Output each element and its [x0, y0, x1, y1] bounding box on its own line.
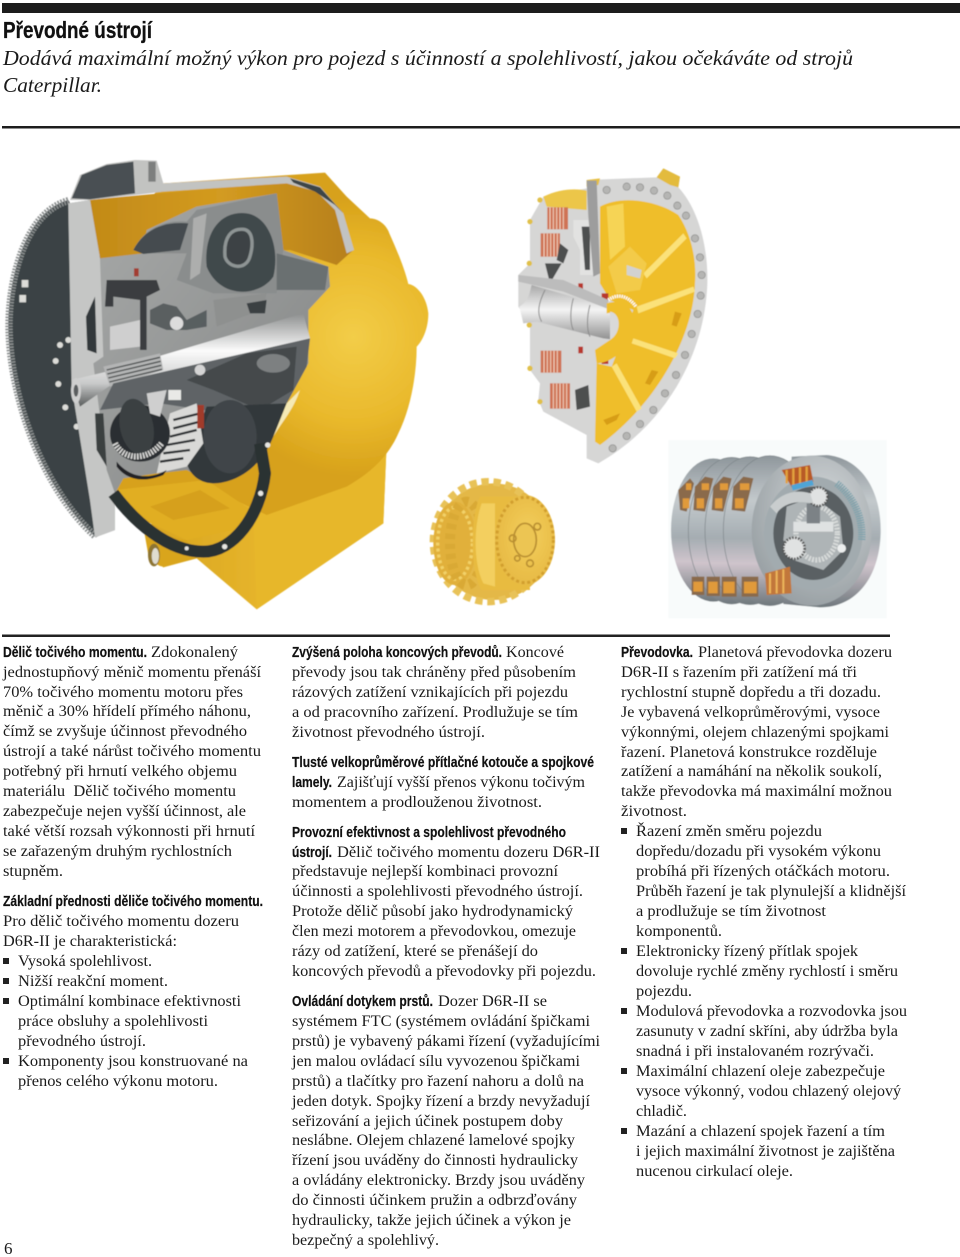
top black bar: [2, 3, 960, 13]
bolt holes: [603, 183, 705, 452]
bolts: [527, 197, 543, 404]
dark channels: [573, 220, 595, 275]
column 3: transmission text: D6R-II s řazením při zatížení má tři: [621, 664, 858, 681]
column 1: torque divider text: čímž se zvyšuje účinnost převodného: [3, 723, 247, 740]
column 2: finger-tip control: jeden dotyk. Spojky řízení a brzdy nevyžadují: [291, 1093, 591, 1110]
column 3: bullet list: Mazání a chlazení spojek řazení a tím: [636, 1123, 886, 1140]
column 2: clutch discs: [292, 755, 594, 811]
column 1: advantages list: D6R-II je charakteristická:: [3, 933, 177, 950]
column 2: finger-tip control: Ovládání dotykem prstů.: [292, 994, 433, 1010]
gray plate section: [68, 193, 330, 537]
column 2: clutch discs: lamely.: [292, 775, 332, 791]
column 3: bullet list: probíhá při řízených otáčkách motoru.: [636, 863, 890, 880]
column 1: torque divider text: materiálu Dělič točivého momentu: [3, 783, 236, 800]
column 1: advantages list: Vysoká spolehlivost.: [18, 953, 152, 970]
column 2: finger-tip control: prstů) a tlačítky pro řazení nahoru a dolů na: [292, 1073, 584, 1090]
column 2: finger-tip control: prstů) je vybavený pákami řízení (vyžadujícími: [292, 1033, 601, 1050]
column 2: finger-tip control: [291, 993, 601, 1249]
column 3: bullet list: Průběh řazení je tak plynulejší a klidnější: [636, 883, 907, 900]
column 3: bullet list: komponentů.: [636, 923, 722, 940]
column 2: operating efficiency: člen mezi motorem a převodovkou, omezuje: [292, 923, 576, 940]
column 2: finger-tip control: bezpečný a spolehlivý.: [292, 1232, 439, 1249]
column 2: clutch discs: momentem a prodlouženou životnost.: [292, 794, 542, 811]
title: Převodné ústrojí: [3, 17, 153, 43]
column 2: finger-tip control: jen malou ovládací sílu vyvozenou špičkami: [291, 1053, 581, 1070]
column 3: transmission text: rychlostní stupně dopředu a tři dozadu.: [621, 684, 881, 701]
column 2: operating efficiency: [292, 825, 600, 980]
hub cylinder: [519, 285, 620, 340]
column 1: advantages list: převodného ústrojí.: [18, 1033, 146, 1050]
interior ochre: [88, 182, 353, 265]
column 2: finger-tip control: systémem FTC (systémem ovládání špičkami: [292, 1013, 591, 1030]
flywheel: [8, 200, 113, 537]
column 3: transmission text: Převodovka.: [621, 645, 693, 661]
column 2: finger-tip control: a ovládány elektronicky. Brzdy jsou uváděny: [292, 1172, 585, 1189]
column 2: finger-tip control: do činnosti účinkem pružin a odbrzďovány: [292, 1192, 577, 1209]
column 1: torque divider text: také větší rozsah výkonnosti při hrnutí: [3, 823, 256, 840]
cut opening: [764, 477, 863, 590]
column 2: operating efficiency: ústrojí.: [292, 845, 332, 861]
column 2: final drives: Zvýšená poloha koncových převodů.: [292, 645, 502, 661]
lower mechanism: [100, 338, 310, 417]
column 2: finger-tip control: neslábne. Olejem chlazené lamelové spojky: [292, 1132, 575, 1149]
column 1: torque divider text: zabezpečuje nejen vyšší účinnost, ale: [3, 803, 246, 820]
column 2: operating efficiency: koncových převodů a převodovky při pojezdu.: [292, 963, 596, 980]
column 3: transmission text: životnost.: [621, 803, 687, 820]
column 1: torque divider text: měnič a 30% hřídelí přímého náhonu,: [3, 703, 251, 720]
column 3: transmission text: [621, 644, 892, 820]
subtitle: Dodává maximální možný výkon pro pojezd s účinností a spolehlivostí, jakou očekáváte od strojů: [2, 46, 853, 70]
column 1: torque divider text: se zařazeným druhým rychlostních: [3, 843, 232, 860]
column 2: finger-tip control: hydraulicky, takže jejich účinek a výkon je: [292, 1212, 571, 1229]
subtitle: Caterpillar.: [3, 73, 102, 97]
column 1: torque divider text: stupněm.: [3, 863, 63, 880]
column 3: transmission text: Je vybavená velkoprůměrovými, vysoce: [621, 704, 880, 721]
column 3: transmission text: takže převodovka má maximální možnou: [621, 783, 892, 800]
column 1: advantages list: Optimální kombinace efektivnosti: [18, 993, 242, 1010]
column 2: finger-tip control: Dozer D6R-II se: [438, 993, 547, 1010]
column 2: final drives: Koncové: [506, 644, 564, 661]
column 3: bullet list: pojezdu.: [636, 983, 692, 1000]
column 1: advantages list: Komponenty jsou konstruované na: [18, 1053, 248, 1070]
column 1: advantages list: Základní přednosti děliče točivého momentu.: [3, 894, 263, 910]
upper torus: [133, 193, 283, 293]
column 2: final drives: a od pracovního zařízení. Prodlužuje se tím: [292, 704, 579, 721]
column 3: bullet list: a prodlužuje se tím životnost: [636, 903, 827, 920]
column 3: bullet list: chladič.: [636, 1103, 687, 1120]
column 3: bullet list: dovoluje rychlé změny rychlostí i směru: [636, 963, 898, 980]
column 3: bullet list: nucenou cirkulací oleje.: [636, 1163, 793, 1180]
column 2: final drives: převody jsou tak chráněny před působením: [292, 664, 577, 681]
highlights: [273, 390, 300, 437]
column 2: operating efficiency: Provozní efektivnost a spolehlivost převodného: [292, 825, 566, 841]
column 3: transmission text: řazení. Planetová konstrukce rozděluje: [621, 744, 877, 761]
column 1: advantages list: práce obsluhy a spolehlivosti: [18, 1013, 209, 1030]
column 3: bullet list: vysoce výkonný, vodou chlazený olejový: [636, 1083, 901, 1100]
bevel gears: [157, 403, 203, 473]
section block detail: [105, 280, 160, 350]
column 2: operating efficiency: rázy od zatížení, které se přenášejí do: [292, 943, 538, 960]
column 2: operating efficiency: účinnosti a spolehlivosti převodného ústrojí.: [292, 883, 583, 900]
column 2: final drives: životnost převodného ústrojí.: [292, 724, 485, 741]
column 1: torque divider text: 70% točivého momentu motoru přes: [3, 684, 243, 701]
column 3: bullet list: zasunuty v zadní skříni, aby údržba byla: [636, 1023, 898, 1040]
windows: [678, 477, 758, 597]
column 1: torque divider text: Dělič točivého momentu.: [3, 645, 147, 661]
column 1: advantages list: Nižší reakční moment.: [18, 973, 168, 990]
output shaft: [72, 313, 310, 407]
dome outer: [100, 173, 428, 515]
friction packs: [541, 207, 570, 409]
column 2: operating efficiency: Dělič točivého momentu dozeru D6R-II: [337, 844, 600, 861]
column 2: operating efficiency: Protože dělič působí jako hydrodynamický: [292, 903, 573, 920]
subtitle: [2, 46, 853, 97]
column 2: final drives: [292, 644, 579, 741]
column 3: bullet list: snadná i při instalovaném rozrývači.: [636, 1043, 874, 1060]
column 3: bullet list: i jejich maximální životnost je zajištěna: [636, 1143, 895, 1160]
column 2: clutch discs: Zajišťují vyšší přenos výkonu točivým: [337, 774, 586, 791]
column 3: bullet list: dopředu/dozadu při vysokém výkonu: [636, 843, 881, 860]
carrier: [783, 497, 843, 570]
column 1: advantages list: [3, 894, 263, 1090]
lower box: [143, 443, 387, 609]
column 2: operating efficiency: představuje nejlepší kombinaci provozní: [292, 863, 559, 880]
flange gasket: [113, 443, 265, 552]
illustration: yellow sprocket gear: [433, 482, 555, 602]
column 3: transmission text: výkonnými, olejem chlazenými spojkami: [621, 724, 890, 741]
illustration: planetary transmission: [668, 440, 887, 618]
illustration: cutaway of torque divider housing: [8, 160, 428, 609]
column 3: bullet list: Elektronicky řízený přítlak spojek: [636, 943, 858, 960]
column 1: torque divider text: jednostupňový měnič momentu přenáší: [2, 664, 262, 681]
column 1: advantages list: přenos celého výkonu motoru.: [18, 1073, 218, 1090]
column 2: finger-tip control: řízení jsou uváděny do činnosti hydraulicky: [292, 1152, 578, 1169]
top casting: [70, 160, 354, 253]
column 3: transmission text: zatížení a namáhání na několik soukolí,: [621, 763, 882, 780]
column 3: bullet list: Modulová převodovka a rozvodovka jsou: [636, 1003, 907, 1020]
column 1: advantages list: Pro dělič točivého momentu dozeru: [3, 913, 239, 930]
column 1: torque divider text: Zdokonalený: [151, 644, 238, 661]
column 2: clutch discs: Tlusté velkoprůměrové přítlačné kotouče a spojkové: [292, 755, 594, 771]
column 1: torque divider text: potřebný při hrnutí velkého objemu: [3, 763, 237, 780]
column 3: bullet list: Maximální chlazení oleje zabezpečuje: [636, 1063, 885, 1080]
column 3: bullet list: Řazení změn směru pojezdu: [636, 821, 822, 840]
column 2: finger-tip control: seřizování a jejich účinek postupem doby: [292, 1113, 563, 1130]
illustration: clutch and brake half section: [518, 168, 707, 463]
yellow disc interior: [595, 200, 695, 445]
column 2: final drives: rázových zatížení vznikajících při pojezdu: [292, 684, 568, 701]
column 1: torque divider text: [2, 644, 262, 880]
column 1: torque divider text: ústrojí a také nárůst točivého momentu: [3, 743, 261, 760]
outer flange: [518, 168, 707, 463]
column 3: transmission text: Planetová převodovka dozeru: [698, 644, 892, 661]
column 3: bullet list: [621, 821, 907, 1180]
